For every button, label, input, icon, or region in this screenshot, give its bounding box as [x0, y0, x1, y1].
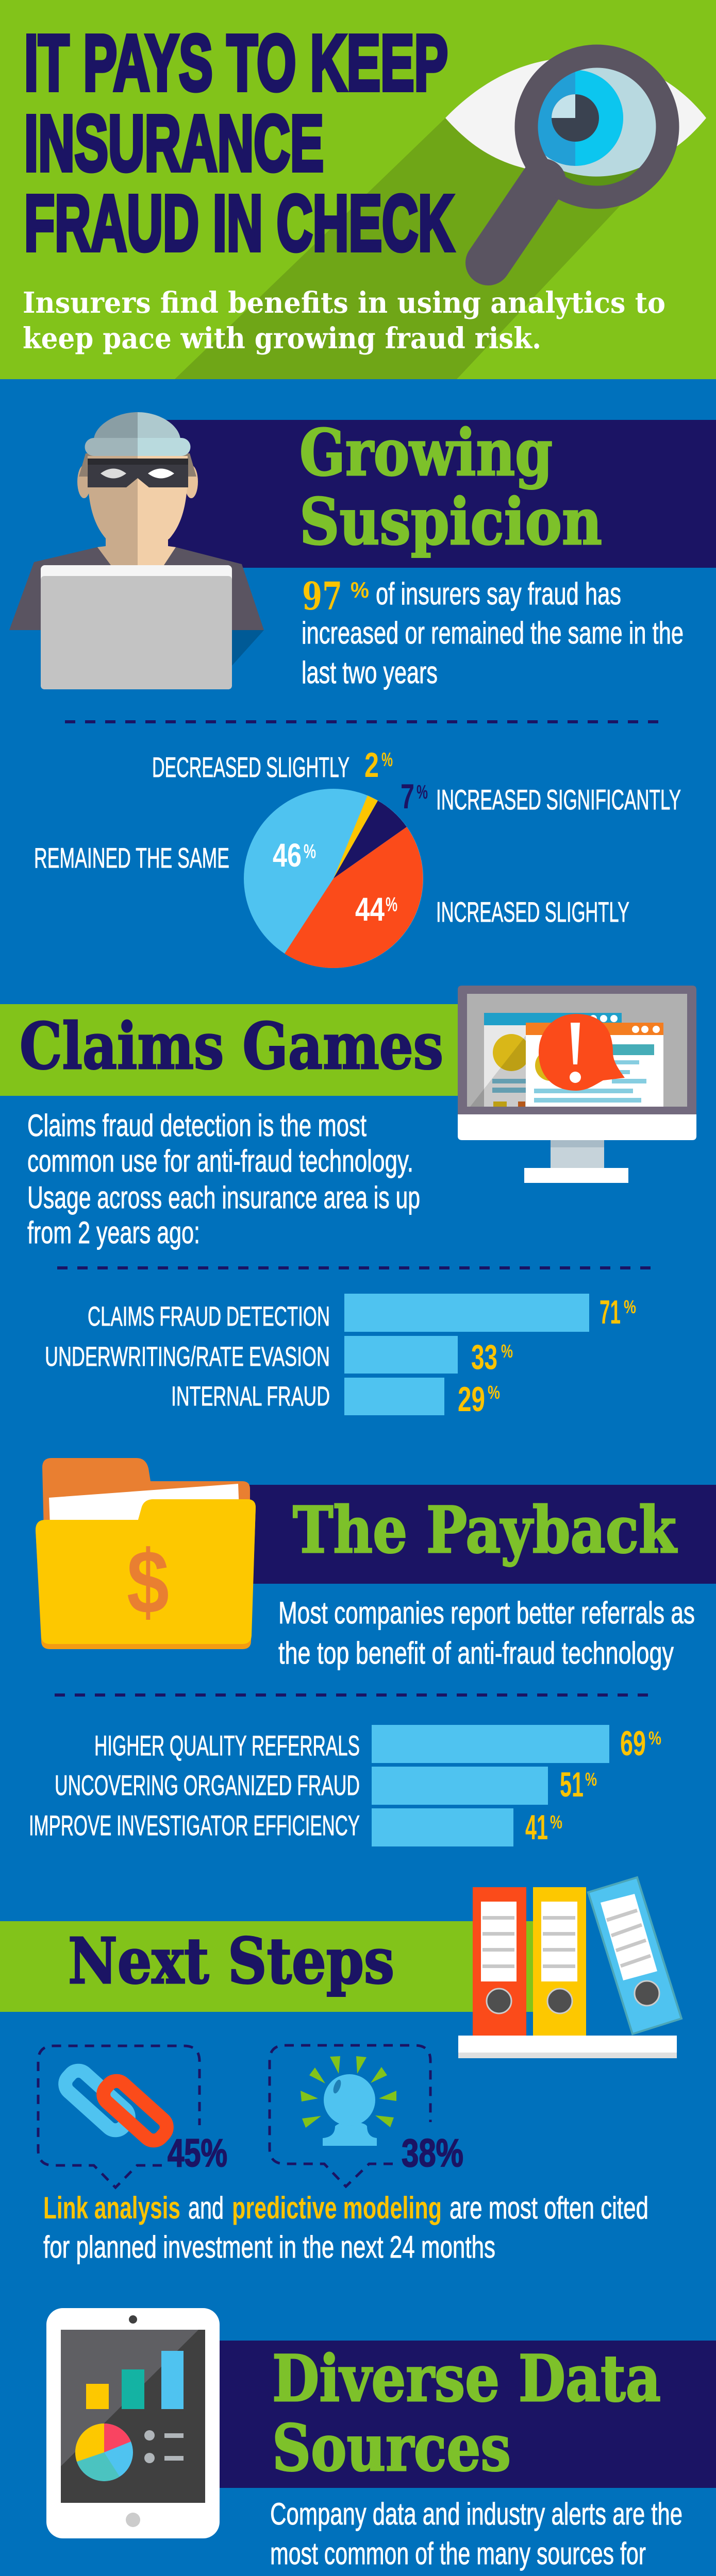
stat: 97 percent: 97 — [302, 574, 342, 619]
icon: thief at laptop — [9, 412, 264, 689]
pie labels — [34, 745, 681, 928]
pie labels: % — [381, 749, 393, 771]
bar chart: uses: INTERNAL FRAUD — [171, 1381, 330, 1412]
bar chart: benefits: 69 — [620, 1724, 646, 1763]
callout: link analysis: 45% — [168, 2131, 227, 2175]
pie chart: 46 — [273, 837, 302, 874]
callout: predictive modeling — [270, 2045, 463, 2187]
callout: link analysis — [38, 2046, 227, 2188]
icon: folder with dollar — [36, 1458, 256, 1649]
pie labels: DECREASED SLIGHTLY — [152, 751, 349, 783]
title: IT PAYS TO KEEP — [24, 19, 448, 107]
stat: 97 percent — [302, 574, 684, 690]
bar chart: benefits: UNCOVERING ORGANIZED FRAUD — [55, 1769, 360, 1801]
pie labels: 7 — [401, 777, 414, 816]
body text — [270, 2497, 682, 2576]
panel: claims games — [0, 986, 696, 1419]
body text — [278, 1596, 695, 1670]
bar chart: benefits: 51 — [560, 1765, 584, 1804]
title — [24, 19, 454, 267]
bar chart: benefits: IMPROVE INVESTIGATOR EFFICIENCY — [29, 1809, 360, 1841]
subtitle: Insurers find benefits in using analytics to — [23, 286, 665, 320]
pie chart: 44 — [355, 891, 385, 928]
bar chart: benefits: 41 — [525, 1808, 548, 1847]
heading band: Claims Games — [20, 1009, 443, 1084]
body text: Claims fraud detection is the most — [27, 1108, 367, 1143]
callout: predictive modeling: 38% — [402, 2131, 463, 2175]
body text: from 2 years ago: — [27, 1215, 200, 1250]
pie labels: REMAINED THE SAME — [34, 842, 229, 874]
icon: eye and magnifying glass — [445, 56, 706, 263]
body text — [27, 1108, 420, 1250]
bar chart: benefits: % — [648, 1727, 661, 1749]
icon: tablet with charts — [46, 2308, 220, 2538]
bar chart: benefits: % — [585, 1769, 597, 1790]
subtitle: keep pace with growing fraud risk. — [23, 321, 541, 355]
body text — [43, 2191, 648, 2264]
heading band — [246, 1485, 716, 1584]
icon: binders on shelf — [458, 1877, 681, 2058]
heading band — [0, 1004, 458, 1096]
pie chart: % — [386, 894, 397, 916]
heading band — [0, 1921, 536, 2012]
panel: diverse data sources — [24, 2308, 716, 2576]
pie labels: % — [417, 782, 428, 803]
bar chart: uses — [45, 1293, 636, 1419]
heading band — [164, 416, 716, 568]
body text: Link analysis — [43, 2191, 180, 2225]
icon: folder with dollar: $ — [127, 1532, 169, 1633]
icon: chain link — [61, 2066, 171, 2145]
stat: 97 percent: last two years — [302, 655, 438, 690]
heading band: Next Steps — [68, 1924, 394, 1998]
pie chart — [244, 789, 423, 968]
subtitle — [23, 286, 665, 355]
panel: growing suspicion — [9, 412, 716, 968]
pie labels: 2 — [364, 745, 379, 785]
panel: header — [0, 0, 716, 379]
bar chart: uses: % — [488, 1382, 500, 1403]
bar chart: uses: UNDERWRITING/RATE EVASION — [45, 1342, 330, 1372]
bar chart: benefits — [29, 1724, 661, 1847]
bar chart: uses: 33 — [471, 1337, 497, 1377]
pie chart: % — [304, 841, 316, 862]
title: INSURANCE — [24, 99, 324, 188]
bar chart: uses: % — [624, 1296, 636, 1317]
heading band: Sources — [272, 2411, 511, 2486]
title: FRAUD IN CHECK — [24, 179, 454, 267]
heading band — [220, 2341, 716, 2488]
heading band: Growing — [299, 416, 553, 490]
panel: the payback — [29, 1458, 716, 1847]
bar chart: uses: % — [501, 1341, 513, 1362]
body text: for planned investment in the next 24 months — [43, 2230, 495, 2264]
stat: 97 percent: % — [351, 578, 369, 603]
bar chart: uses: 29 — [458, 1380, 485, 1419]
heading band: Suspicion — [299, 485, 602, 560]
body text: predictive modeling — [232, 2191, 442, 2225]
stat: 97 percent: of insurers say fraud has — [376, 577, 621, 611]
bar chart: benefits: % — [550, 1811, 562, 1833]
bar chart: uses: CLAIMS FRAUD DETECTION — [88, 1301, 330, 1332]
body text: common use for anti-fraud technology. — [27, 1144, 413, 1178]
icon: monitor with alert — [458, 986, 696, 1183]
body text: and — [188, 2191, 224, 2225]
body text: Usage across each insurance area is up — [27, 1180, 420, 1215]
bar chart: benefits: HIGHER QUALITY REFERRALS — [94, 1730, 360, 1761]
icon: crystal ball — [301, 2056, 396, 2146]
bar chart: uses: 71 — [600, 1293, 621, 1331]
body text: are most often cited — [449, 2191, 648, 2225]
panel: next steps — [0, 1877, 681, 2264]
